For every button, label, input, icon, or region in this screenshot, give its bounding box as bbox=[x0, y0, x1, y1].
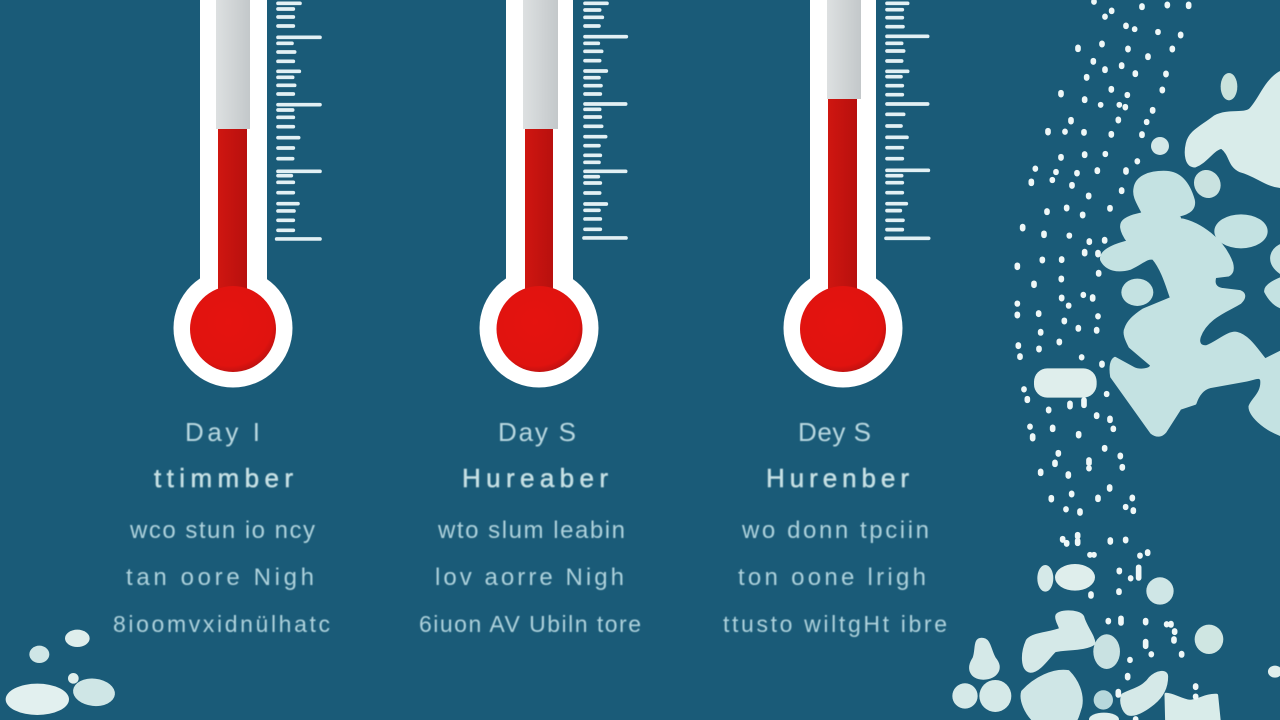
text block: day 5 second bbox=[723, 417, 947, 637]
teardrop blob bbox=[72, 677, 116, 708]
pear blob bbox=[971, 639, 998, 678]
small egg blob bbox=[1221, 73, 1237, 100]
small droplet bbox=[68, 673, 79, 684]
text block: day 1 bbox=[113, 417, 330, 637]
large oval bbox=[6, 684, 69, 715]
snow dots: upper field bbox=[1017, 1, 1189, 358]
text block: day 1: Day I bbox=[185, 417, 260, 447]
edge lobe upper bbox=[1272, 245, 1280, 273]
text block: day 5: wto slum leabin bbox=[437, 517, 625, 544]
snow dots and ice blobs: lower field bbox=[952, 363, 1280, 720]
far right small blob bbox=[1268, 666, 1280, 678]
fin blob bbox=[1122, 672, 1167, 714]
scale ticks: day 5 bbox=[584, 3, 626, 238]
text block: day 1: wco stun io ncy bbox=[129, 517, 315, 544]
large pale blob bbox=[1186, 73, 1280, 187]
notched round blob bbox=[1146, 577, 1174, 605]
thermometer: day 5 bbox=[480, 0, 598, 388]
text block: day 5 bbox=[419, 417, 641, 637]
big lower blob bbox=[1022, 671, 1081, 720]
text block: day 5 second: Dey S bbox=[798, 417, 871, 447]
round blob right bbox=[979, 680, 1011, 712]
round blob left bbox=[952, 683, 978, 709]
middle oval bbox=[29, 646, 49, 663]
thermometer: day 1 bbox=[174, 0, 292, 388]
text block: day 5 second: ttusto wiltgHt ibre bbox=[723, 611, 947, 637]
text block: day 1: tan oore Nigh bbox=[126, 564, 314, 591]
edge lobe lower bbox=[1266, 278, 1280, 307]
cut-off blob bbox=[1166, 694, 1219, 720]
connected blob bbox=[1023, 612, 1094, 671]
small dim blob bbox=[1094, 690, 1113, 710]
scale ticks: day 1 bbox=[277, 3, 320, 239]
scale ticks: day 5 second bbox=[886, 3, 929, 238]
right round blob bbox=[1195, 625, 1223, 654]
oval blob centre bbox=[1093, 634, 1120, 669]
oval blob bbox=[1189, 165, 1226, 203]
lower round blob bbox=[1121, 279, 1153, 306]
bottom edge blob bbox=[1089, 713, 1119, 720]
text block: day 1: ttimmber bbox=[154, 463, 293, 493]
text block: day 5 second: wo donn tpciin bbox=[741, 517, 929, 544]
wide oval blob bbox=[1214, 214, 1268, 248]
text block: day 5 second: ton oone lrigh bbox=[738, 564, 926, 591]
paired oval blob right bbox=[1055, 564, 1095, 591]
text block: day 5: 6iuon AV Ubiln tore bbox=[419, 611, 641, 637]
upper oval bbox=[65, 630, 90, 647]
ice blobs: upper right bbox=[1101, 73, 1280, 435]
paired oval blob left bbox=[1037, 565, 1053, 592]
text block: day 5: Day S bbox=[498, 417, 576, 447]
text block: day 5 second: Hurenber bbox=[766, 463, 909, 493]
text block: day 5: lov aorre Nigh bbox=[435, 564, 624, 591]
thermometer: day 5 second bbox=[784, 0, 902, 388]
pill blob bbox=[1034, 368, 1097, 398]
falling dots bbox=[1024, 363, 1196, 720]
text block: day 5: Hureaber bbox=[462, 463, 608, 493]
text block: day 1: 8ioomvxidnülhatc bbox=[113, 611, 330, 637]
round blob bbox=[1151, 137, 1169, 155]
central blob bbox=[1101, 172, 1280, 435]
ice blobs: lower left bbox=[6, 630, 116, 715]
